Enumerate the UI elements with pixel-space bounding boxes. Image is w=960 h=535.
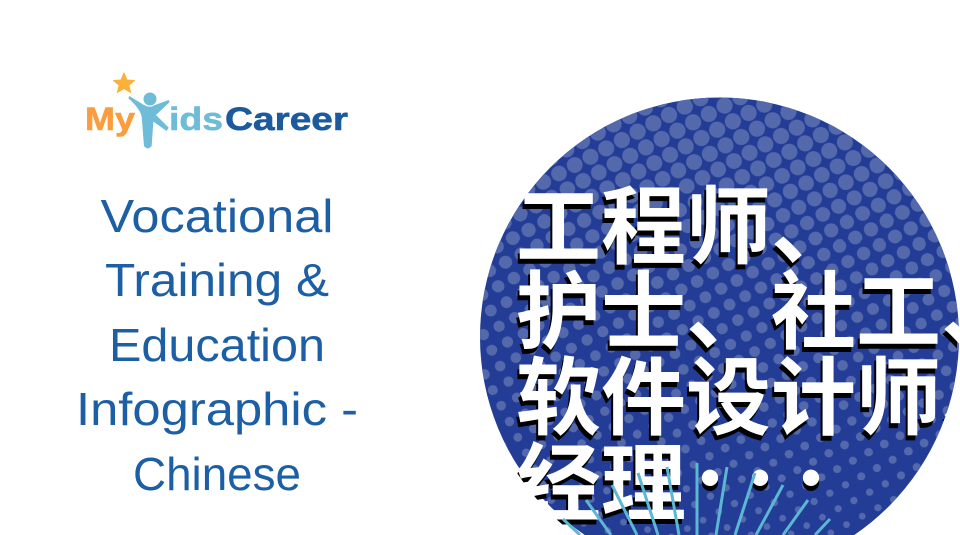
title: Vocational Training & Education Infographic - Chinese: Training & [105, 254, 329, 306]
headline: 工程师、护士、社工、软件设计师、经理···: • [699, 444, 721, 511]
headline shadow: • [749, 449, 771, 516]
logo word: Career: Career [225, 101, 348, 137]
headline shadow: • [800, 449, 822, 516]
headline: 工程师、护士、社工、软件设计师、经理···: 经理 [516, 438, 686, 533]
headline: 工程师、护士、社工、软件设计师、经理···: • [800, 444, 822, 511]
logo word: My: My [85, 101, 135, 137]
headline shadow: 工程师、 [514, 186, 854, 281]
headline: 工程师、护士、社工、软件设计师、经理···: 工程师、 [516, 181, 856, 276]
title: Vocational Training & Education Infographic - Chinese [76, 190, 358, 500]
icon: child figure [128, 92, 170, 148]
title: Vocational Training & Education Infographic - Chinese: Infographic - [76, 383, 358, 435]
title: Vocational Training & Education Infographic - Chinese: Vocational [100, 190, 334, 242]
logo word: ids: ids [169, 101, 223, 137]
halftone dots [480, 95, 960, 535]
headline shadow: • [699, 449, 721, 516]
rays: teal burst lines [563, 463, 830, 535]
panel: blue dotted circle [480, 95, 960, 535]
headline shadow [514, 186, 960, 535]
title: Vocational Training & Education Infographic - Chinese: Education [109, 319, 325, 371]
title: Vocational Training & Education Infographic - Chinese: Chinese [133, 448, 301, 500]
logo: MyKidsCareer [85, 73, 348, 148]
headline: 工程师、护士、社工、软件设计师、经理···: • [749, 444, 771, 511]
icon: star [114, 73, 134, 92]
headline: 工程师、护士、社工、软件设计师、经理··· [516, 181, 960, 533]
